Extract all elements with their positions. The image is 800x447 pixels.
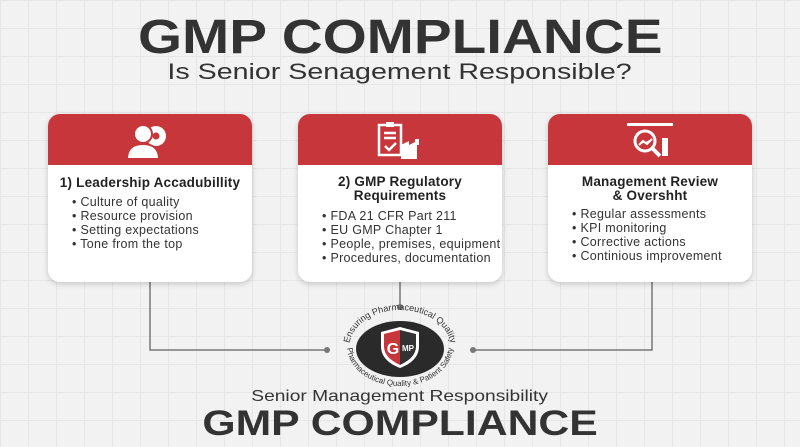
footer title: GMP COMPLIANCE <box>202 404 598 443</box>
card: leadership <box>48 114 252 282</box>
subtitle: Is Senior Senagement Responsible? <box>168 59 632 84</box>
card: leadership: Culture of quality <box>80 195 180 209</box>
card: regulatory: 2) GMP Regulatory <box>338 174 462 189</box>
card: management review: Regular assessments <box>580 207 706 221</box>
emblem: GMP shield: G <box>387 341 399 358</box>
emblem: GMP shield <box>344 305 456 388</box>
card: regulatory: EU GMP Chapter 1 <box>330 223 443 237</box>
icon: clipboard and factory <box>298 114 502 165</box>
icon: magnifier chart <box>548 114 752 165</box>
emblem: GMP shield: Ensuring Pharmaceutical Quality <box>344 305 456 342</box>
card: regulatory: FDA 21 CFR Part 211 <box>330 209 457 223</box>
card: leadership: Resource provision <box>80 209 193 223</box>
card: leadership: Setting expectations <box>80 223 199 237</box>
card: regulatory <box>298 114 502 282</box>
emblem: GMP shield: MP <box>402 344 415 353</box>
title: GMP COMPLIANCE <box>138 11 662 64</box>
emblem: GMP shield: Pharmaceutical Quality & Patient Safety <box>347 348 454 388</box>
card: management review: Continious improvement <box>580 249 722 263</box>
card: management review: KPI monitoring <box>580 221 667 235</box>
card: regulatory: Procedures, documentation <box>330 251 491 265</box>
card: regulatory: Requirements <box>354 188 446 203</box>
card: leadership: 1) Leadership Accadubillity <box>60 175 240 190</box>
card: management review: Management Review <box>582 174 718 189</box>
card: management review: Corrective actions <box>580 235 686 249</box>
card: regulatory: People, premises, equipment <box>330 237 500 251</box>
card: management review: & Overshht <box>613 188 687 203</box>
card: leadership: Tone from the top <box>80 237 183 251</box>
footer subtitle: Senior Management Responsibility <box>252 388 548 405</box>
icon: person with gear <box>48 114 252 165</box>
card: management review <box>548 114 752 282</box>
